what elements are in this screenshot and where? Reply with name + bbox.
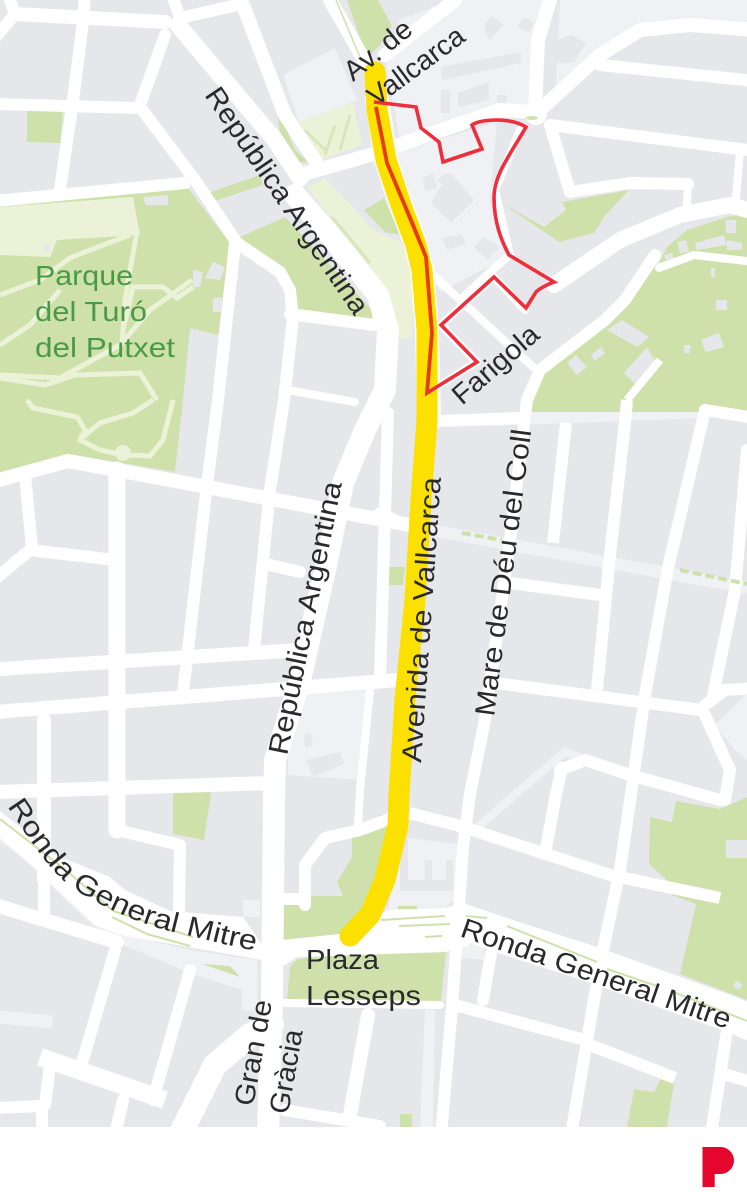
pale green areas and park paths — [0, 103, 414, 461]
label: Parque del Turó del Putxet: del Turó — [35, 296, 147, 327]
label: Gran de Gràcia: Gràcia — [263, 1027, 309, 1116]
label: Gran de Gràcia — [228, 997, 309, 1116]
lower page background — [0, 1127, 747, 1194]
park: strip beside República Argentina — [240, 217, 372, 325]
wide avenues — [268, 195, 388, 1135]
park: east block — [649, 797, 747, 1000]
park: Turó del Putxet — [0, 188, 230, 475]
label: Av. de: Av. de — [337, 13, 418, 87]
red route on the avenue — [376, 107, 432, 393]
buildings — [44, 15, 747, 990]
label: Parque del Turó del Putxet: Parque — [35, 260, 133, 291]
label: Farigola: Farigola — [446, 318, 546, 411]
label: Gran de Gràcia: Gran de — [228, 997, 278, 1108]
red perimeter outline — [374, 102, 554, 393]
logo: red P — [702, 1147, 734, 1187]
label: República Argentina north: República Argentina — [199, 81, 376, 320]
label: Vallcarca: Vallcarca — [361, 20, 471, 112]
label: Parque del Turó del Putxet: del Putxet — [35, 332, 175, 363]
yellow route: Avenida de Vallcarca — [350, 72, 427, 936]
park: Plaza Lesseps — [287, 947, 446, 1001]
label: Mare de Déu del Coll: Mare de Déu del Coll — [469, 427, 537, 718]
label: Plaza Lesseps: Lesseps — [306, 980, 421, 1011]
label: Avenida de Vallcarca: Avenida de Vallcarca — [396, 475, 447, 763]
park: Coll hillside — [530, 250, 747, 412]
green ellipse at junction — [526, 116, 538, 120]
label: Ronda General Mitre east: Ronda General Mitre — [457, 912, 736, 1035]
label: Ronda General Mitre west: Ronda General Mitre — [8, 798, 256, 950]
label: Plaza Lesseps: Plaza — [306, 944, 379, 975]
park: near Lesseps — [282, 815, 395, 940]
junction — [525, 103, 547, 125]
square-ended side streets — [409, 400, 720, 1078]
label: República Argentina south: República Argentina — [262, 478, 348, 757]
label: Parque del Turó del Putxet — [35, 260, 175, 363]
label: Plaza Lesseps — [306, 944, 421, 1011]
Ronda General Mitre west and plaza carriageway — [0, 811, 470, 965]
Ronda General Mitre east — [457, 920, 747, 1026]
